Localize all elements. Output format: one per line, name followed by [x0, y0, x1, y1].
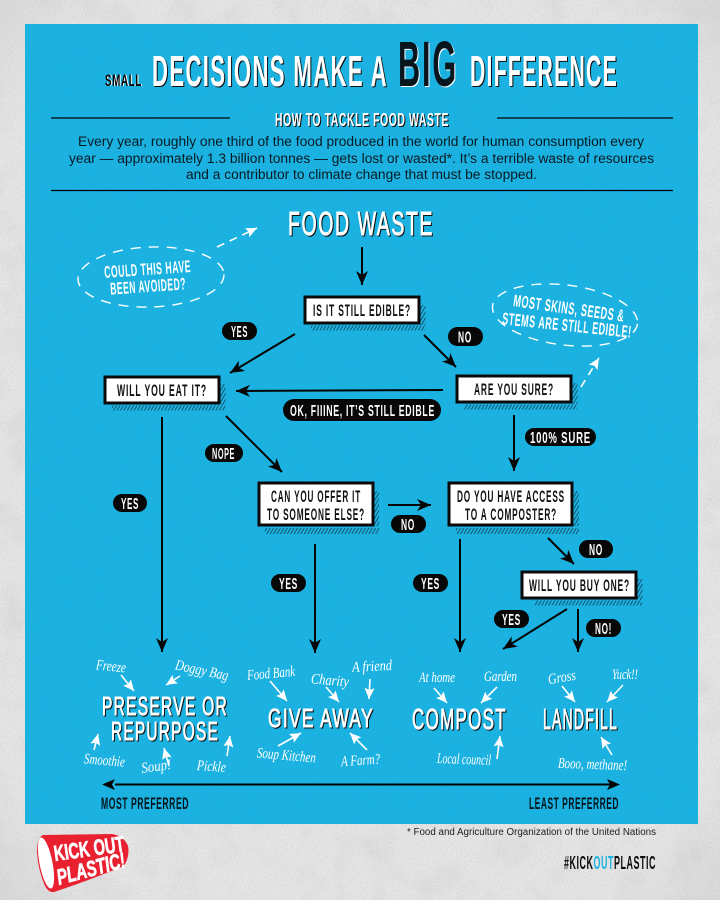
- pill: no: [448, 327, 483, 346]
- pill: no composter: [579, 540, 613, 559]
- notes: landfill: Yuck!!: [612, 667, 638, 683]
- arrow: 100% sure: [513, 415, 515, 471]
- footnote: * Food and Agriculture Organization of the United Nations: [407, 827, 656, 838]
- arrow: composter no: [548, 538, 574, 564]
- pill: no!: [586, 619, 621, 638]
- notes: preserve: Doggy Bag: [173, 657, 230, 684]
- divider left: [51, 117, 230, 119]
- intro text: year — approximately 1.3 billion tonnes — gets lost or wasted*. It’s a terrible waste of resources: [69, 151, 654, 166]
- arrow: offer yes: [314, 544, 316, 653]
- outcome: preserve or repurpose: REPURPOSE: [111, 716, 219, 746]
- label: most preferred: MOST PREFERRED: [101, 794, 189, 813]
- decision: will you buy one: [522, 572, 642, 606]
- outcome: preserve or repurpose: PRESERVE OR: [102, 691, 228, 721]
- decision: are you sure: ARE YOU SURE?: [474, 381, 554, 399]
- pill: yes composter: YES: [421, 576, 440, 593]
- arrow: composter yes: [459, 539, 461, 652]
- decision: can you offer it: TO SOMEONE ELSE?: [267, 506, 365, 524]
- arrow: nope: [226, 416, 282, 472]
- notes: preserve: Soup!: [140, 757, 172, 777]
- decision: composter access: TO A COMPOSTER?: [465, 506, 557, 524]
- decision: is it still edible: IS IT STILL EDIBLE?: [313, 302, 411, 320]
- text: LEAST PREFERRED: [529, 794, 619, 813]
- notes: compost: Garden: [484, 669, 517, 685]
- preference scale arrow: [102, 779, 620, 790]
- pill: no offer: NO: [401, 517, 415, 534]
- divider lower: [51, 190, 673, 192]
- logo: kick out plastic: KICK OUT: [52, 831, 126, 866]
- arrow: buy yes: [503, 609, 567, 649]
- arrow: food waste to edible: [361, 247, 363, 285]
- outcome: compost: COMPOST: [412, 704, 507, 736]
- notes: landfill: Booo, methane!: [558, 756, 627, 774]
- decision: will you eat it: WILL YOU EAT IT?: [117, 382, 207, 400]
- callout: could this have been avoided: COULD THIS HAVE: [104, 257, 192, 282]
- logo: kick out plastic: [35, 831, 129, 892]
- callout: could this have been avoided: [77, 244, 225, 310]
- decision: will you eat it: [105, 377, 226, 410]
- notes: give away: Soup Kitchen: [256, 745, 316, 767]
- pill: ok fiiine: OK, FIIINE, IT’S STILL EDIBLE: [290, 403, 435, 420]
- outcome: preserve or repurpose: [102, 691, 228, 746]
- pill: 100% sure: 100% SURE: [530, 430, 591, 447]
- pill: yes: [222, 322, 257, 341]
- arrow: dashed to food waste: [217, 228, 257, 247]
- decision: can you offer it: [259, 483, 379, 534]
- decision: are you sure: [457, 376, 578, 410]
- pill: yes eat: [113, 494, 147, 513]
- intro text: Every year, roughly one third of the food produced in the world for human consumption every: [78, 134, 644, 149]
- title: [105, 28, 618, 100]
- outcome: give away: GIVE AWAY: [268, 703, 374, 733]
- arrow: edible no: [424, 335, 456, 367]
- pill: yes buy: [494, 610, 529, 629]
- arrow: dashed to skins callout: [581, 358, 599, 387]
- pill: ok fiiine: [283, 399, 441, 421]
- callout: could this have been avoided: BEEN AVOIDED?: [110, 274, 187, 299]
- notes: preserve: Freeze: [95, 657, 127, 677]
- notes: give away: Food Bank: [246, 664, 296, 684]
- notes: landfill: [547, 667, 638, 774]
- pill: 100% sure: [525, 428, 596, 447]
- pill: yes offer: [271, 574, 306, 593]
- arrow: still edible: [236, 390, 443, 391]
- decision: composter access: [449, 483, 579, 534]
- notes: give away: Charity: [310, 671, 350, 691]
- decision: composter access: DO YOU HAVE ACCESS: [457, 488, 565, 506]
- notes: preserve: Pickle: [196, 758, 227, 776]
- pill: yes: YES: [231, 324, 248, 341]
- notes: preserve: [83, 657, 230, 777]
- arrow: offer no: [388, 504, 431, 506]
- intro text: and a contributor to climate change that must be stopped.: [186, 167, 537, 182]
- title: BIG: [398, 28, 458, 100]
- notes: give away: A friend: [351, 658, 393, 676]
- title: SMALL: [105, 71, 142, 90]
- pill: yes eat: YES: [121, 496, 139, 513]
- arrow: edible yes: [230, 334, 295, 373]
- notes: compost: At home: [418, 670, 455, 686]
- divider right: [497, 117, 673, 119]
- decision: is it still edible: [305, 297, 426, 330]
- notes: preserve: Smoothie: [83, 751, 126, 771]
- intro text: [69, 134, 654, 182]
- subheading: HOW TO TACKLE FOOD WASTE: [275, 110, 449, 130]
- notes: compost: Local council: [436, 751, 491, 769]
- start label: food waste: FOOD WASTE: [288, 205, 434, 242]
- notes: compost: [418, 669, 517, 769]
- callout: most skins: MOST SKINS, SEEDS &: [512, 291, 626, 326]
- pill: no composter: NO: [589, 542, 603, 559]
- pill: no offer: [391, 515, 426, 534]
- callout: most skins: [489, 276, 641, 354]
- decision: can you offer it: CAN YOU OFFER IT: [271, 488, 361, 506]
- arrow: eat it yes: [161, 417, 163, 652]
- pill: yes buy: YES: [502, 612, 521, 629]
- pill: yes offer: YES: [279, 576, 298, 593]
- pill: no: NO: [458, 330, 472, 346]
- title: DECISIONS MAKE A: [152, 47, 388, 96]
- notes: landfill: Gross: [547, 668, 577, 688]
- pill: nope: [205, 444, 243, 463]
- pill: nope: NOPE: [212, 446, 235, 463]
- arrow: buy no: [577, 609, 579, 652]
- notes: give away: [246, 658, 393, 770]
- logo: kick out plastic: PLASTIC!: [54, 848, 128, 890]
- pill: no!: NO!: [595, 621, 612, 638]
- notes: give away: A Farm?: [340, 752, 381, 770]
- text: LANDFILL: [543, 704, 618, 736]
- hashtag: #KICKOUTPLASTIC: [564, 853, 656, 873]
- pill: yes composter: [413, 574, 448, 593]
